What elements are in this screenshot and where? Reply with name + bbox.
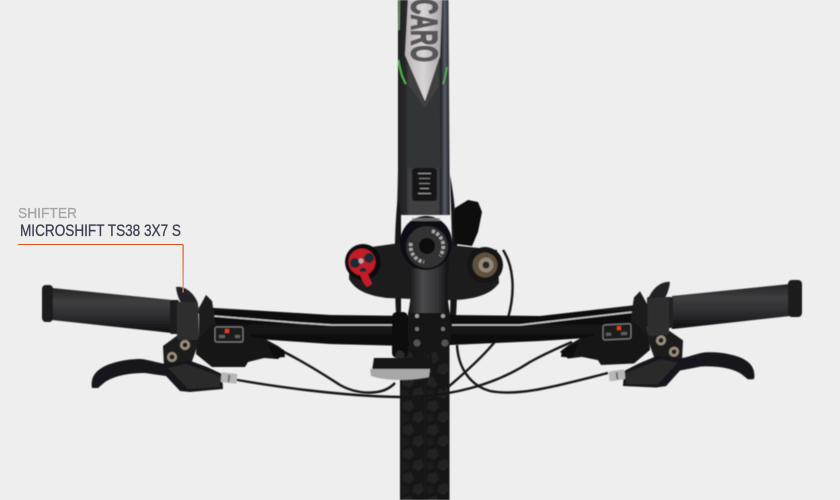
bell strap and reflector <box>370 312 430 380</box>
callout: shifter <box>18 205 184 292</box>
right grip <box>647 280 802 329</box>
lockout remote <box>345 244 381 287</box>
green stripes <box>398 60 406 84</box>
frame down tube <box>395 0 458 316</box>
top cap <box>406 226 448 268</box>
handlebar <box>199 304 645 346</box>
white head badge <box>405 0 442 101</box>
right shifter and brake lever <box>560 278 754 392</box>
brake and shift cables <box>232 250 608 397</box>
callout model name: MICROSHIFT TS38 3X7 S <box>20 222 181 240</box>
head tube sticker <box>412 168 437 201</box>
stem <box>400 216 452 352</box>
frame lettering: CARO <box>404 0 444 62</box>
fork side edges <box>395 195 401 312</box>
left grip <box>42 285 179 334</box>
headset spacer <box>400 216 452 270</box>
fork adjuster knob <box>467 247 503 283</box>
fork crown <box>349 243 499 300</box>
callout heading: SHIFTER <box>18 205 77 222</box>
left shifter and brake lever <box>92 287 286 392</box>
stem clamp <box>408 313 451 352</box>
front tire <box>400 345 450 500</box>
brake caliper <box>453 200 482 246</box>
leader line <box>18 244 184 292</box>
chevron inner panel <box>408 85 441 168</box>
